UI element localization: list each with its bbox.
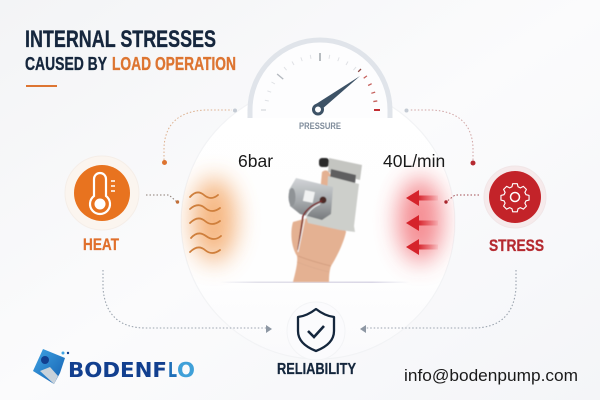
- connector: heat to gauge: [162, 108, 237, 165]
- logo: Bodenflo: L: [168, 358, 177, 382]
- icon: stress arrows: [406, 190, 438, 255]
- spec label: 6bar: 6bar: [238, 151, 273, 171]
- pressure gauge: [250, 40, 390, 132]
- spec label: 40L/min: 40L/min: [383, 151, 445, 171]
- heat label: HEAT: [83, 235, 119, 254]
- reliability label: RELIABILITY: [277, 361, 357, 378]
- title: [25, 26, 236, 87]
- connector: heat to waves: [146, 195, 179, 204]
- gauge needle: [314, 76, 360, 114]
- hand: [291, 170, 346, 282]
- stress label: STRESS: [489, 236, 544, 255]
- logo: Bodenflo: [33, 349, 195, 384]
- contact email: info@bodenpump.com: [404, 366, 578, 385]
- pump housing: [306, 176, 359, 232]
- icon: stress gear: [484, 166, 546, 228]
- gauge label: PRESSURE: [299, 121, 341, 132]
- connector: stress to gauge: [404, 108, 476, 166]
- wires: [298, 201, 322, 250]
- logo: Bodenflo: O: [177, 358, 195, 382]
- photo: hand holding pump: [288, 158, 362, 282]
- pump head: [319, 158, 362, 184]
- title: LOAD OPERATION: [112, 53, 236, 74]
- connector: stress to arrows: [444, 195, 479, 204]
- panel: central circle stage: [181, 107, 455, 310]
- connector: stress to reliability: [360, 270, 516, 333]
- logo: Bodenflo: BODENF: [68, 358, 167, 382]
- motor: [289, 178, 333, 220]
- icon: reliability shield: [287, 302, 345, 360]
- icon: heat thermometer: [65, 156, 139, 230]
- icon: heat waves: [190, 192, 221, 253]
- title: CAUSED BY: [25, 53, 107, 74]
- title: INTERNAL STRESSES: [25, 26, 216, 53]
- connector: heat to reliability: [103, 270, 272, 333]
